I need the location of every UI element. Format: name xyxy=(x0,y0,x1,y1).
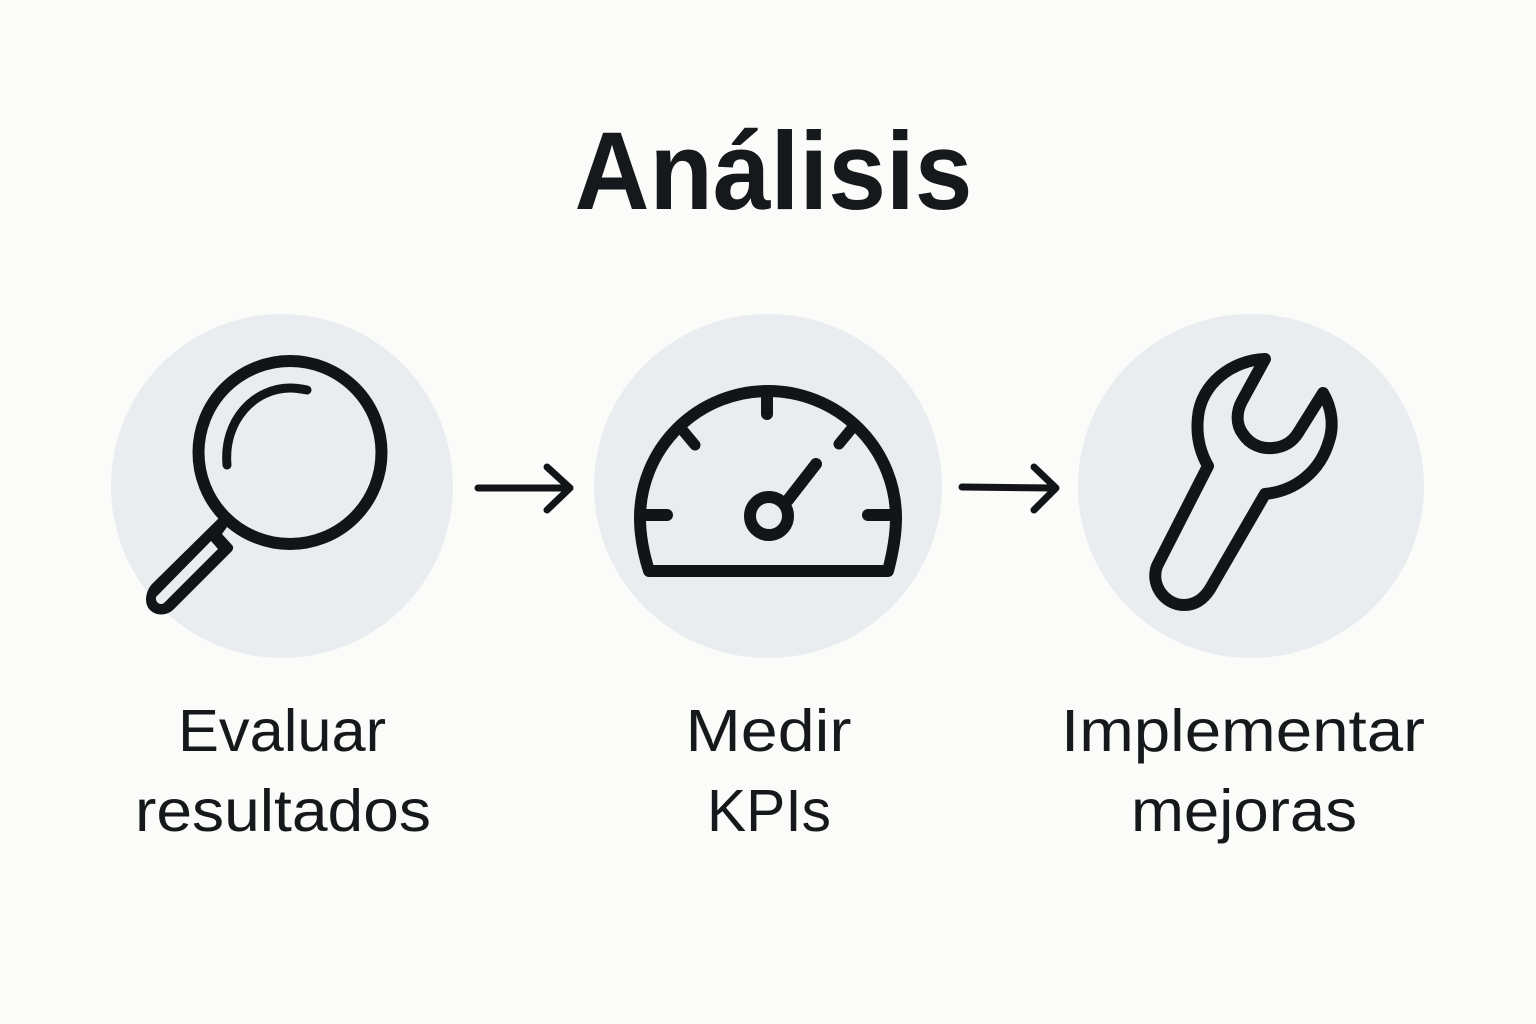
icon: speedometer gauge xyxy=(640,391,896,571)
arrow: medir to implementar xyxy=(962,467,1056,510)
panel: medir kpis xyxy=(594,314,942,844)
icon: magnifying glass xyxy=(146,361,382,614)
label: medir kpis: KPIs xyxy=(707,778,831,844)
arrow: evaluar to medir xyxy=(478,467,570,510)
icon background circle: implementar xyxy=(1078,314,1424,658)
label: implementar mejoras xyxy=(1061,698,1425,844)
label: implementar mejoras: Implementar xyxy=(1061,698,1425,764)
label: evaluar resultados: resultados xyxy=(135,778,431,844)
title: Análisis xyxy=(574,110,972,233)
panel: implementar mejoras xyxy=(1061,314,1425,844)
label: medir kpis: Medir xyxy=(686,698,852,764)
label: implementar mejoras: mejoras xyxy=(1131,778,1357,844)
icon: wrench xyxy=(1155,359,1332,605)
label: evaluar resultados xyxy=(135,698,431,844)
icon background circle: evaluar xyxy=(111,314,453,658)
label: evaluar resultados: Evaluar xyxy=(178,698,386,764)
icon background circle: medir xyxy=(594,314,942,658)
panel: evaluar resultados xyxy=(111,314,453,844)
label: medir kpis xyxy=(686,698,852,844)
